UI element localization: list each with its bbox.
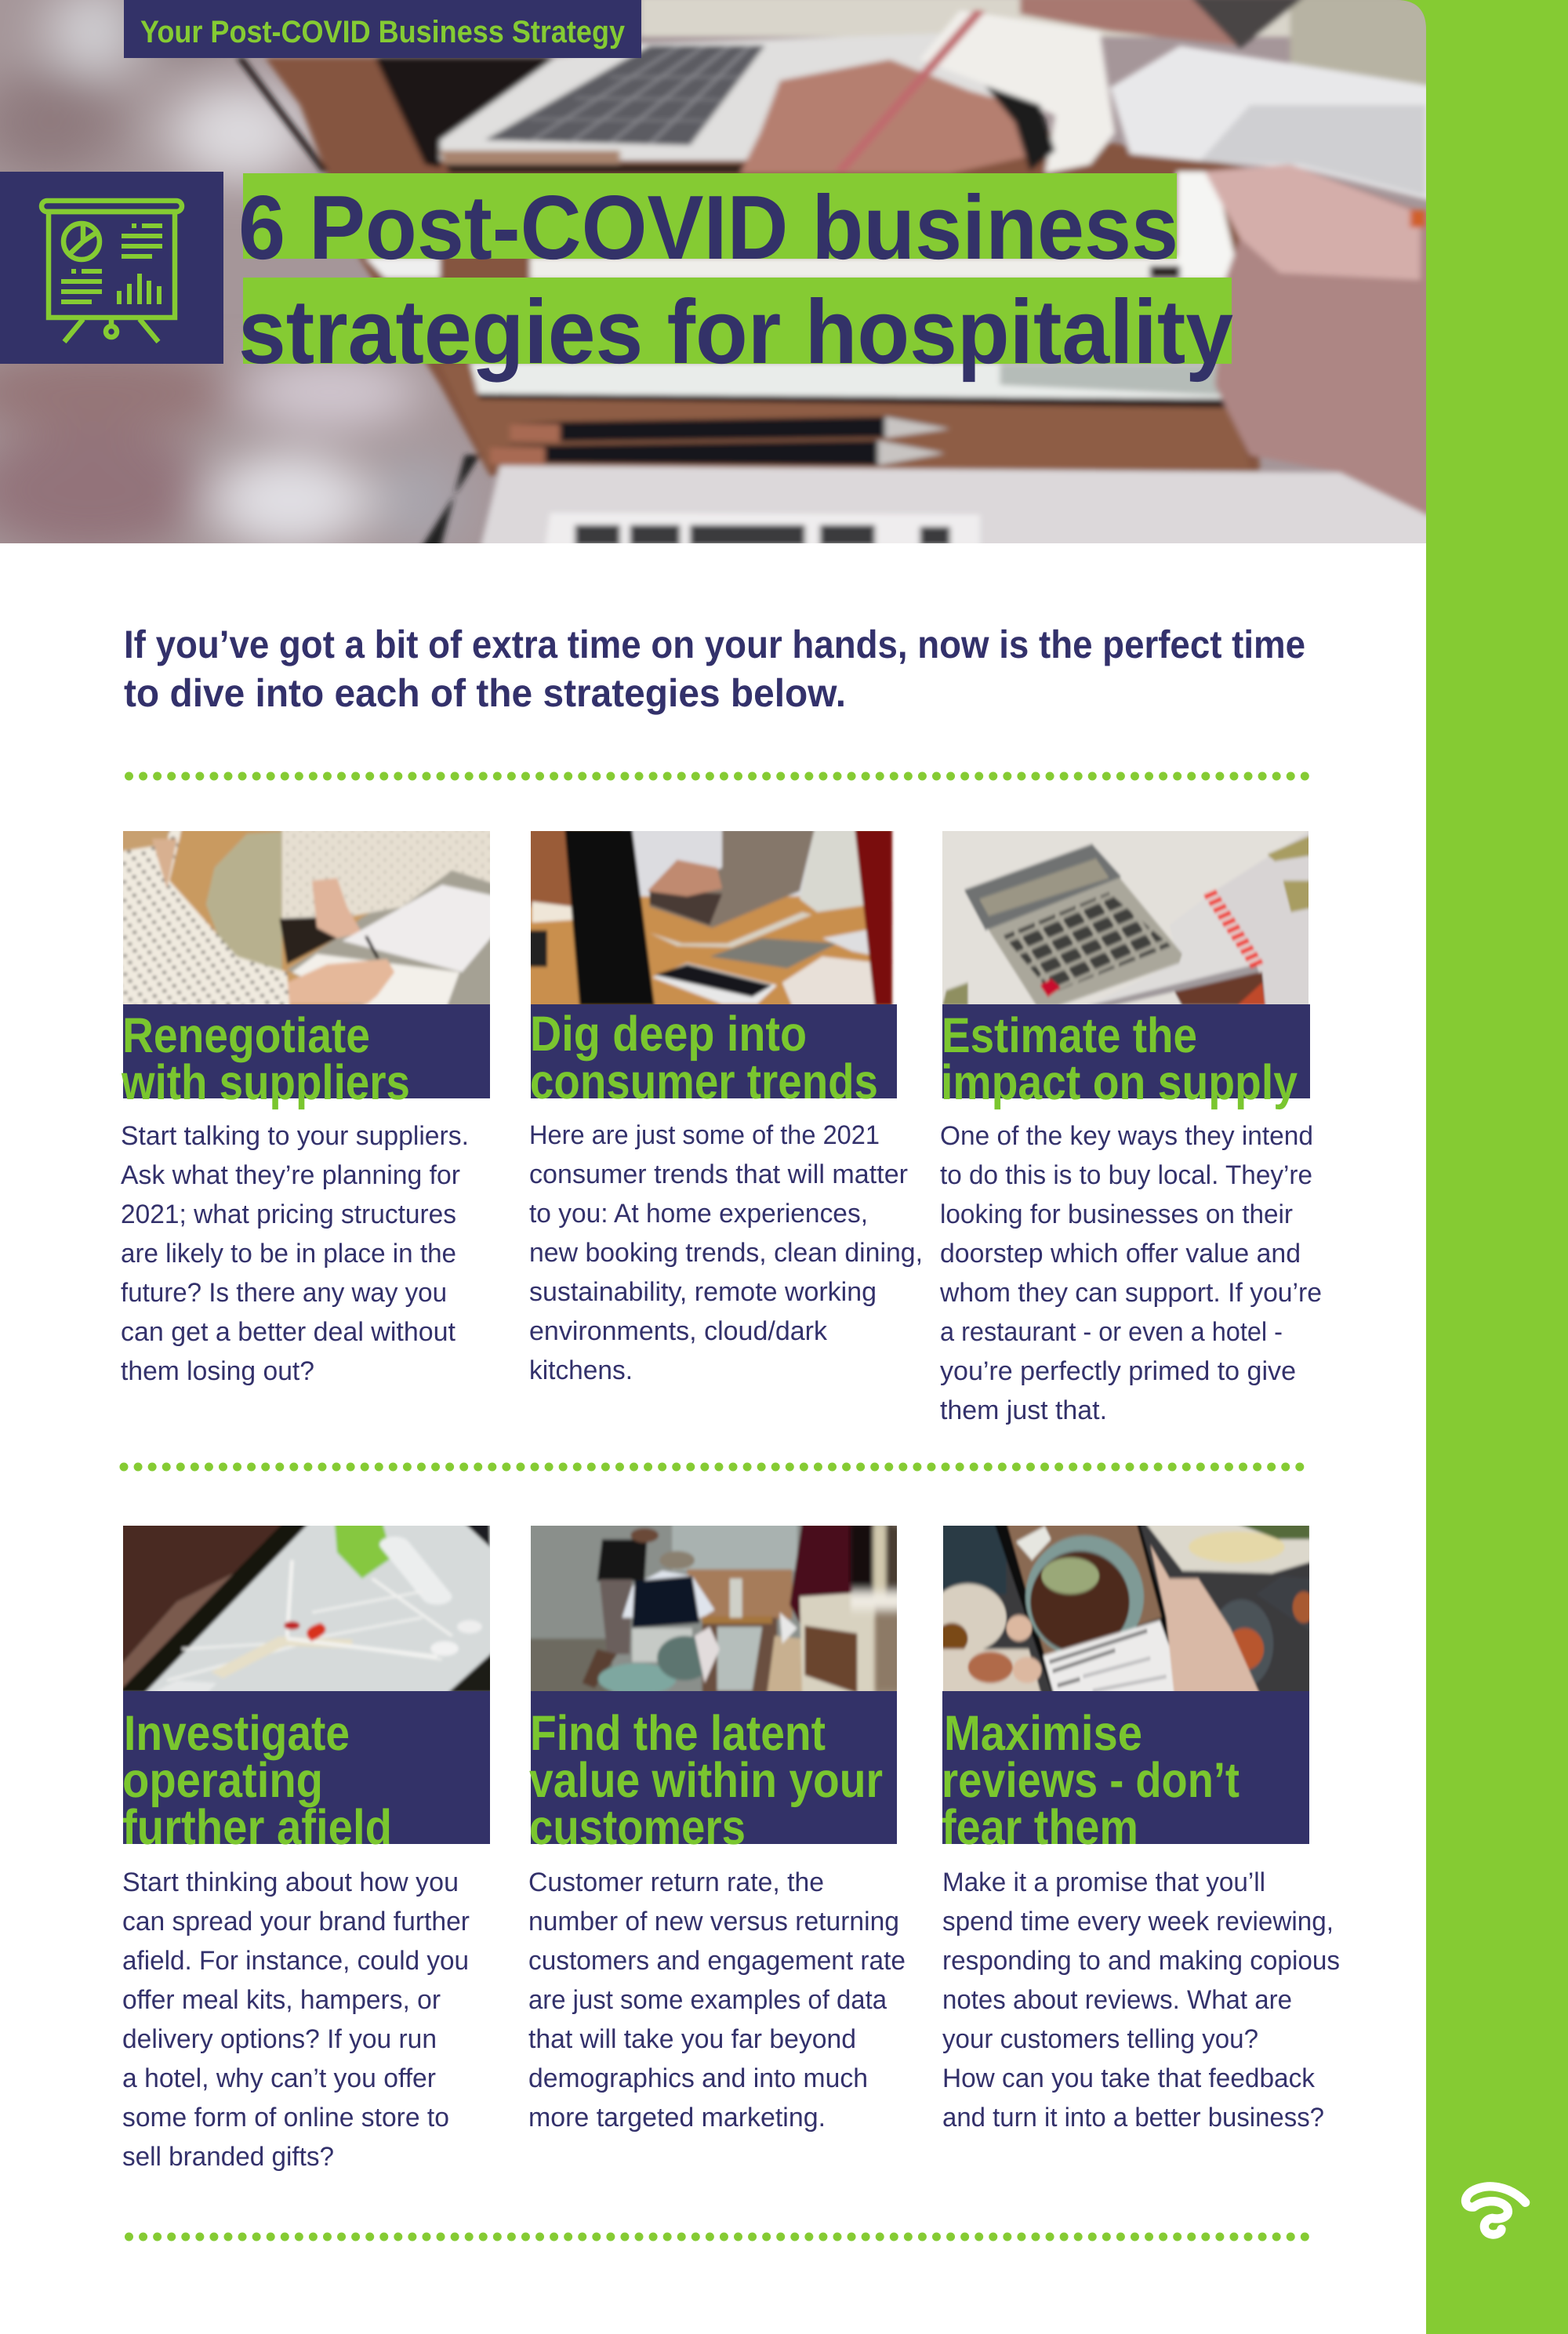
- body text: 2021; what pricing structures: [121, 1200, 456, 1229]
- heading: Estimate the: [942, 1008, 1197, 1063]
- icon: presentation board: [0, 172, 223, 364]
- heading: impact on supply: [941, 1055, 1298, 1110]
- title: [238, 173, 1233, 383]
- body text: One of the key ways they intend: [940, 1121, 1313, 1151]
- body text: sustainability, remote working: [529, 1277, 877, 1307]
- heading: consumer trends: [530, 1054, 878, 1109]
- body text: can spread your brand further: [122, 1907, 470, 1937]
- photo: calculator on paperwork: [936, 826, 1316, 1009]
- heading: [529, 1691, 897, 1855]
- green side bar: [1380, 0, 1568, 2334]
- heading: customers: [529, 1800, 746, 1855]
- body text: future? Is there any way you: [121, 1278, 447, 1308]
- heading: [942, 1691, 1309, 1855]
- body text: to you: At home experiences,: [529, 1199, 868, 1229]
- heading: with suppliers: [121, 1055, 410, 1110]
- heading: [122, 1691, 490, 1855]
- heading: value within your: [529, 1753, 883, 1808]
- photo: restaurant interior: [522, 1521, 902, 1696]
- body text: [122, 1868, 470, 2172]
- body text: to do this is to buy local. They’re: [940, 1160, 1312, 1190]
- heading: [941, 1004, 1310, 1110]
- body text: [529, 1120, 923, 1385]
- body text: number of new versus returning: [528, 1907, 899, 1937]
- body text: Start talking to your suppliers.: [121, 1121, 469, 1151]
- body text: that will take you far beyond: [528, 2024, 856, 2054]
- panel: latent value within customers: [522, 1521, 906, 2133]
- pens: [510, 416, 950, 443]
- body text: some form of online store to: [122, 2103, 449, 2133]
- body text: your customers telling you?: [942, 2024, 1258, 2054]
- body text: can get a better deal without: [121, 1317, 456, 1347]
- intro text: [124, 623, 1305, 715]
- body text: [528, 1868, 906, 2133]
- body text: looking for businesses on their: [940, 1200, 1293, 1229]
- body text: whom they can support. If you’re: [939, 1278, 1322, 1308]
- body text: consumer trends that will matter: [529, 1160, 908, 1189]
- body text: kitchens.: [529, 1356, 633, 1385]
- top banner: Your Post-COVID Business Strategy: [140, 15, 626, 49]
- body text: Ask what they’re planning for: [121, 1160, 460, 1190]
- body text: Here are just some of the 2021: [529, 1120, 880, 1150]
- body text: notes about reviews. What are: [942, 1985, 1292, 2015]
- heading: Find the latent: [530, 1706, 826, 1761]
- photo: desk with laptop and calculator: [517, 826, 892, 1009]
- body text: spend time every week reviewing,: [942, 1907, 1334, 1937]
- body text: Make it a promise that you’ll: [942, 1868, 1265, 1897]
- body text: [939, 1121, 1322, 1425]
- title: 6 Post-COVID business: [238, 176, 1178, 278]
- heading: operating: [122, 1753, 323, 1808]
- photo: two people with documents: [123, 831, 490, 1004]
- body text: customers and engagement rate: [528, 1946, 906, 1976]
- heading: Dig deep into: [530, 1007, 807, 1062]
- body text: demographics and into much: [528, 2064, 868, 2093]
- body text: them just that.: [940, 1396, 1107, 1425]
- heading: [121, 1004, 490, 1110]
- body text: are likely to be in place in the: [121, 1239, 456, 1269]
- heading: fear them: [942, 1800, 1138, 1855]
- heading: further afield: [122, 1800, 392, 1855]
- heading: Renegotiate: [122, 1008, 370, 1063]
- body text: them losing out?: [121, 1356, 314, 1386]
- icon: white wifi logo: [1466, 2187, 1526, 2234]
- body text: Customer return rate, the: [528, 1868, 824, 1897]
- panel: impact on supply: [936, 826, 1322, 1425]
- body text: afield. For instance, could you: [122, 1946, 469, 1976]
- body text: delivery options? If you run: [122, 2024, 437, 2054]
- body text: a hotel, why can’t you offer: [122, 2064, 436, 2093]
- intro text: to dive into each of the strategies below.: [124, 671, 846, 715]
- hero photo: laptop and hands at a table: [0, 0, 1450, 553]
- panel: investigate operating further afield: [112, 1519, 502, 2172]
- body text: [121, 1121, 469, 1386]
- body text: more targeted marketing.: [528, 2103, 826, 2133]
- panel: consumer trends: [517, 826, 923, 1385]
- photo: phone with map: [112, 1519, 502, 1696]
- body text: How can you take that feedback: [942, 2064, 1316, 2093]
- body text: environments, cloud/dark: [529, 1316, 828, 1346]
- body text: you’re perfectly primed to give: [940, 1356, 1296, 1386]
- body text: doorstep which offer value and: [940, 1239, 1301, 1269]
- body text: Start thinking about how you: [122, 1868, 459, 1897]
- body text: and turn it into a better business?: [942, 2103, 1324, 2133]
- body text: [942, 1868, 1340, 2133]
- body text: a restaurant - or even a hotel -: [940, 1317, 1283, 1347]
- title: strategies for hospitality: [238, 281, 1233, 383]
- panel: maximise reviews: [930, 1521, 1340, 2133]
- body text: are just some examples of data: [528, 1985, 887, 2015]
- body text: offer meal kits, hampers, or: [122, 1985, 441, 2015]
- intro text: If you’ve got a bit of extra time on your hands, now is the perfect time: [124, 623, 1305, 666]
- wood: [265, 58, 1260, 476]
- top banner: [124, 0, 641, 58]
- heading: Investigate: [124, 1706, 350, 1761]
- body text: responding to and making copious: [942, 1946, 1340, 1976]
- body text: new booking trends, clean dining,: [529, 1238, 923, 1268]
- heading: reviews - don’t: [942, 1753, 1240, 1808]
- panel: renegotiate with suppliers: [112, 826, 502, 1386]
- heading: Maximise: [944, 1706, 1142, 1761]
- bottom laptop: [420, 455, 480, 550]
- body text: sell branded gifts?: [122, 2142, 334, 2172]
- heading: [530, 1004, 897, 1109]
- photo: phone showing food review: [930, 1521, 1316, 1696]
